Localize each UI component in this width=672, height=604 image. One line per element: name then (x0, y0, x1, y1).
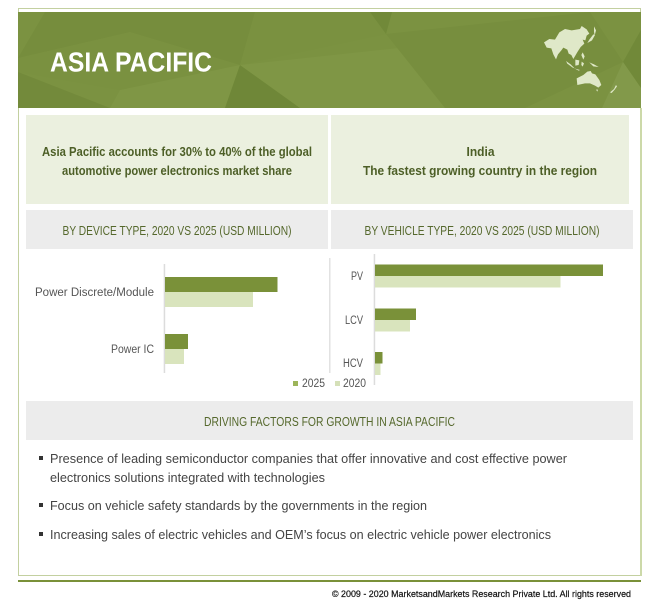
bar chart: vehicle type (343, 254, 603, 385)
bar chart: device type (35, 258, 330, 373)
legend: 2020 (343, 378, 366, 390)
bullet 3: Increasing sales of electric vehicles and OEM’s focus on electric vehicle power electronics (50, 528, 551, 542)
label: Power Discrete/Module: Power Discrete/Module (35, 287, 154, 299)
legend (293, 378, 366, 390)
icon: Asia Pacific map (544, 26, 617, 93)
panel: market share callout (26, 115, 328, 204)
bullet 2: Focus on vehicle safety standards by the governments in the region (50, 499, 427, 513)
heading: by device type: BY DEVICE TYPE, 2020 VS 2025 (USD MILLION) (62, 224, 292, 238)
legend: 2025 (302, 378, 325, 390)
label: HCV: HCV (343, 358, 363, 370)
label: Power IC: Power IC (111, 344, 154, 356)
bullet 1 (39, 452, 567, 485)
list: driving factors (39, 452, 567, 542)
panel: fastest growing country callout: The fastest growing country in the region (363, 163, 597, 178)
bullet 1: electronics solutions integrated with technologies (50, 471, 325, 485)
bar: HCV 2020 (375, 364, 380, 375)
bar: LCV 2025 (375, 308, 416, 320)
bar: Power Discrete/Module 2020 (165, 292, 253, 307)
bar: Power Discrete/Module 2025 (165, 277, 278, 292)
title: ASIA PACIFIC (50, 46, 212, 78)
panel: market share callout: Asia Pacific accounts for 30% to 40% of the global (42, 144, 312, 159)
bar: PV 2020 (375, 276, 560, 288)
header banner (18, 12, 641, 108)
bullet 1: Presence of leading semiconductor companies that offer innovative and cost effective power (50, 452, 567, 466)
panel: fastest growing country callout: India (466, 144, 495, 159)
label: LCV: LCV (345, 315, 363, 327)
heading: by device type (26, 210, 328, 249)
bar: HCV 2025 (375, 352, 382, 364)
footer copyright: © 2009 - 2020 MarketsandMarkets Research Private Ltd. All rights reserved (332, 589, 631, 599)
bar: Power IC 2025 (165, 334, 188, 349)
heading: driving factors: DRIVING FACTORS FOR GROWTH IN ASIA PACIFIC (204, 415, 455, 429)
bar: Power IC 2020 (165, 349, 184, 364)
bar: PV 2025 (375, 264, 603, 276)
heading: driving factors (26, 401, 633, 440)
panel: fastest growing country callout (331, 115, 629, 204)
heading: by vehicle type: BY VEHICLE TYPE, 2020 VS 2025 (USD MILLION) (364, 224, 600, 238)
label: PV: PV (351, 271, 363, 283)
heading: by vehicle type (331, 210, 633, 249)
bar: LCV 2020 (375, 320, 410, 332)
panel: market share callout: automotive power electronics market share (62, 163, 292, 178)
